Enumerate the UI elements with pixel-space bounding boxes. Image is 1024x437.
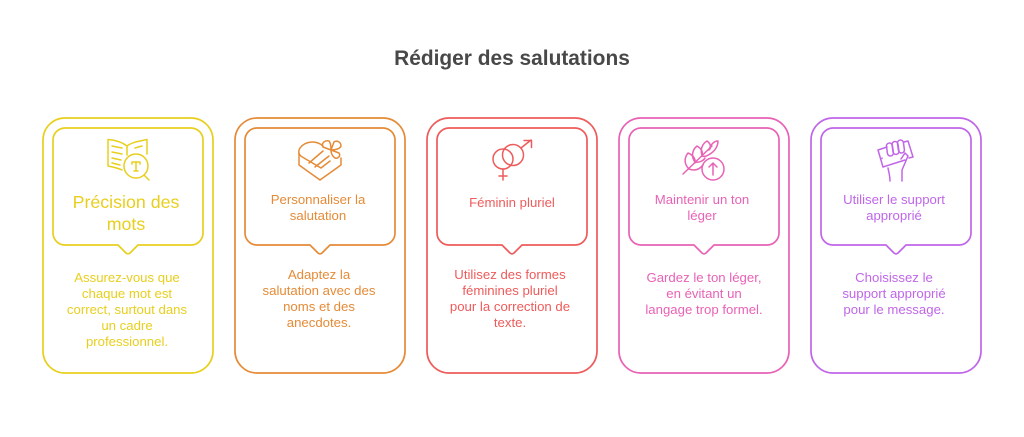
description: texte.: [494, 315, 526, 330]
heading: mots: [107, 214, 145, 234]
description: [645, 270, 763, 317]
title: Rédiger des salutations: [394, 47, 630, 70]
description: [263, 267, 376, 330]
heading: Maintenir un ton: [655, 192, 749, 207]
description: féminines pluriel: [462, 283, 558, 298]
heading: salutation: [290, 208, 346, 223]
description: anecdotes.: [287, 315, 351, 330]
description: langage trop formel.: [645, 302, 763, 317]
heading: [655, 192, 749, 223]
heading: Précision des: [73, 192, 179, 212]
description: [67, 270, 188, 349]
icon: wheat with up arrow: [683, 141, 724, 180]
description: professionnel.: [86, 334, 168, 349]
heading: Féminin pluriel: [469, 195, 555, 210]
panel: féminin pluriel: [427, 118, 597, 373]
speech box: utiliser: [821, 128, 971, 254]
description: un cadre: [101, 318, 153, 333]
panel: utiliser le support approprié: [811, 118, 981, 373]
heading: léger: [687, 208, 717, 223]
panel: maintenir un ton léger: [619, 118, 789, 373]
speech box: précision des mots: [53, 128, 203, 254]
description: Assurez-vous que: [74, 270, 180, 285]
panel: précision des mots: [43, 118, 213, 373]
icon: book with magnifier: [108, 140, 149, 180]
description: support approprié: [842, 286, 946, 301]
description: [450, 267, 570, 330]
description: pour la correction de: [450, 299, 570, 314]
heading: [73, 192, 179, 234]
heading: [271, 192, 366, 223]
panel: personnaliser la salutation: [235, 118, 405, 373]
description: Adaptez la: [288, 267, 351, 282]
heading: Personnaliser la: [271, 192, 366, 207]
description: noms et des: [283, 299, 355, 314]
description: chaque mot est: [82, 286, 172, 301]
heading: approprié: [866, 208, 922, 223]
description: Utilisez des formes: [454, 267, 566, 282]
description: salutation avec des: [263, 283, 376, 298]
speech box: maintenir: [629, 128, 779, 254]
description: en évitant un: [666, 286, 742, 301]
description: correct, surtout dans: [67, 302, 188, 317]
speech box: féminin pluriel: [437, 128, 587, 254]
description: [842, 270, 946, 317]
description: Gardez le ton léger,: [646, 270, 762, 285]
speech box: personnaliser: [245, 128, 395, 254]
heading: [843, 192, 945, 223]
icon: fist holding phone: [878, 140, 913, 181]
description: pour le message.: [843, 302, 945, 317]
heading: Utiliser le support: [843, 192, 945, 207]
description: Choisissez le: [855, 270, 933, 285]
icon: gender symbols: [493, 140, 532, 180]
icon: heart gift box: [299, 141, 341, 180]
